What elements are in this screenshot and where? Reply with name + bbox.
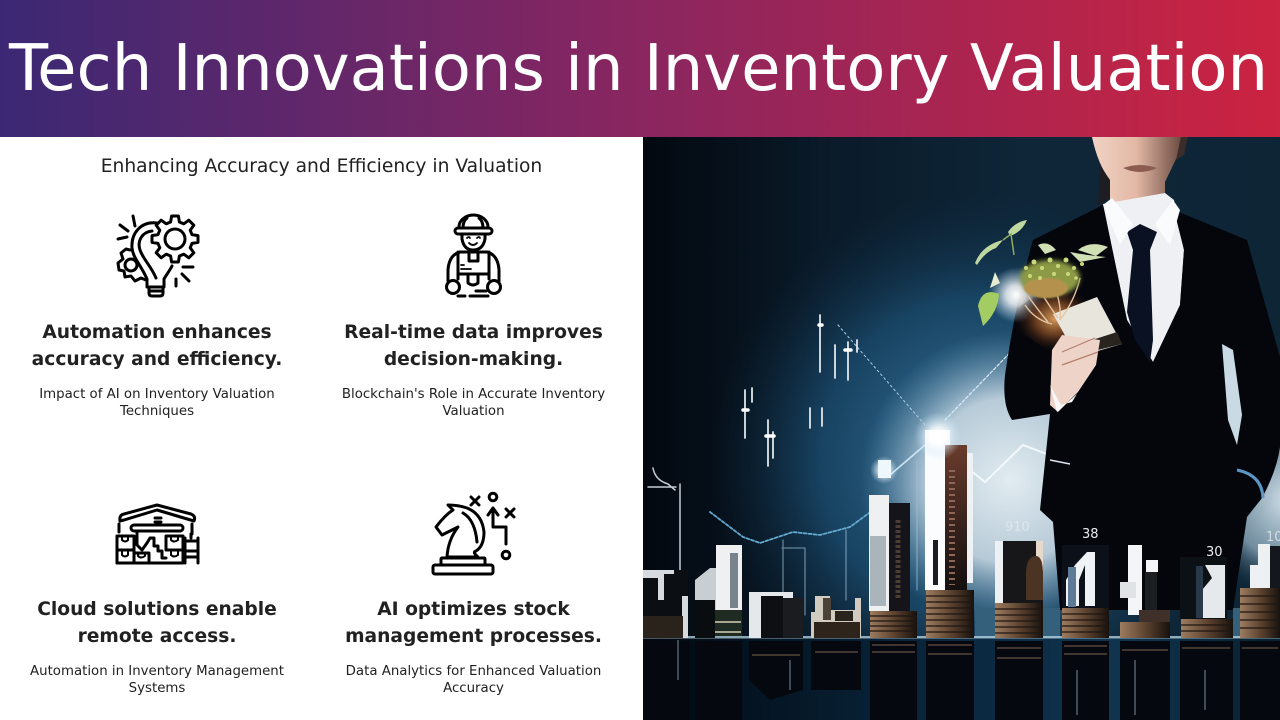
heading: cloud solutions: [37, 599, 277, 647]
tower: mid: [869, 495, 889, 611]
tower: coin stack right: [995, 541, 1043, 611]
tower numerals: 30: [1206, 545, 1223, 560]
tower numerals: 910: [1005, 520, 1030, 535]
collar: [1103, 198, 1180, 245]
tower: tall glowing: [925, 430, 950, 590]
skyline of coin towers: [643, 430, 1280, 638]
tower: far right: [1240, 588, 1280, 638]
tower: far left: [643, 570, 688, 616]
description: real-time data: Blockchain's Role in Accurate Inventory Valuation: [342, 387, 605, 419]
heading: AI optimizes: [345, 599, 602, 647]
title banner: Tech Innovations in Inventory Valuation: [9, 32, 1268, 106]
title banner: [0, 0, 1280, 137]
description: cloud solutions: Automation in Inventory Management Systems: [30, 664, 284, 696]
icon: chess knight strategy: [432, 492, 516, 576]
tower: coin stack: [811, 596, 861, 638]
heading: AI optimizes: management processes.: [345, 626, 602, 647]
icon: construction worker: [445, 214, 502, 298]
tower: centre group: [1062, 545, 1109, 608]
plant: [975, 220, 1108, 326]
heading: cloud solutions: Cloud solutions enable: [37, 599, 277, 620]
shirt: [1103, 193, 1184, 362]
hand and card: [1015, 286, 1122, 412]
glow behind plant: [988, 267, 1044, 323]
tower: low block: [749, 592, 793, 638]
floor and water reflection: [643, 608, 1280, 720]
suit jacket: [1004, 205, 1280, 610]
tower: left: [716, 545, 742, 613]
subtitle: Enhancing Accuracy and Efficiency in Valuation: [101, 156, 542, 177]
icon: warehouse with boxes: [116, 504, 200, 564]
photo: businesswoman holding plant above city of coins: [643, 137, 1280, 720]
description: AI optimizes: Data Analytics for Enhanced Valuation Accuracy: [346, 664, 601, 696]
photo background: [643, 137, 1280, 720]
necktie: [1127, 224, 1157, 362]
tower numerals: 38: [1082, 527, 1099, 542]
man in suit: [1004, 137, 1280, 610]
tower numerals: [1005, 520, 1280, 560]
face and neck: [1092, 137, 1181, 225]
icon: lightbulb with gears: [116, 214, 200, 298]
heading: automation: Automation enhances accuracy and efficiency.: [32, 322, 282, 370]
lights: [870, 412, 962, 484]
description: automation: Impact of AI on Inventory Valuation Techniques: [39, 387, 275, 419]
tower: right group: [1180, 557, 1227, 619]
heading: real-time data: Real-time data improves decision-making.: [344, 322, 603, 370]
chart lines and candlesticks: [648, 315, 1070, 615]
heading: AI optimizes: AI optimizes stock: [377, 599, 570, 620]
heading: cloud solutions: remote access.: [78, 626, 236, 647]
